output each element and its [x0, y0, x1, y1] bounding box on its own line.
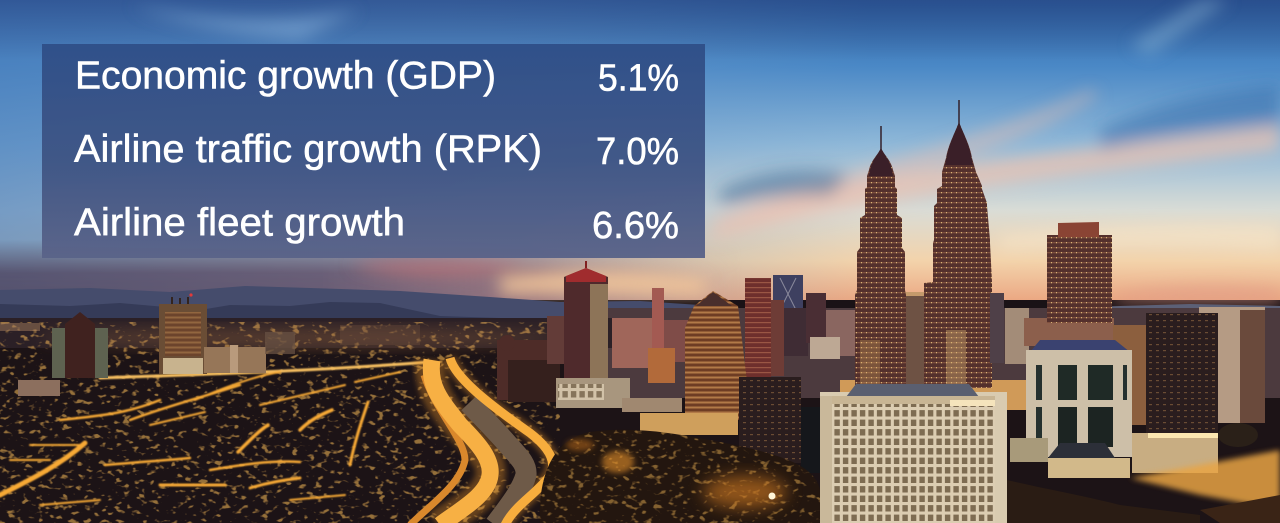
city ground with street lights	[0, 308, 1280, 523]
row: airline fleet growth: 6.6%	[592, 205, 679, 247]
mid-town towers	[622, 275, 856, 473]
foreground hotel	[820, 384, 1007, 523]
Petronas towers	[855, 100, 1029, 388]
row: airline fleet growth	[74, 202, 679, 247]
highway	[410, 358, 553, 523]
trees and foreground lights	[540, 425, 1280, 523]
tall tower with cap	[1024, 222, 1147, 425]
clouds	[130, 0, 1280, 302]
statistics panel	[42, 44, 705, 258]
pillared building	[1010, 340, 1132, 478]
left buildings	[0, 293, 420, 396]
row: economic growth: 5.1%	[598, 58, 679, 100]
sky background	[0, 0, 1280, 300]
row: economic growth: Economic growth (GDP)	[75, 54, 496, 98]
row: economic growth	[75, 54, 679, 100]
distant mountains	[0, 286, 1280, 335]
far right buildings	[1132, 307, 1265, 473]
row: airline traffic growth: 7.0%	[596, 131, 679, 173]
central red tower and neighbours	[497, 261, 688, 408]
row: airline traffic growth: Airline traffic growth (RPK)	[74, 128, 542, 171]
row: airline fleet growth: Airline fleet growth	[74, 202, 405, 244]
